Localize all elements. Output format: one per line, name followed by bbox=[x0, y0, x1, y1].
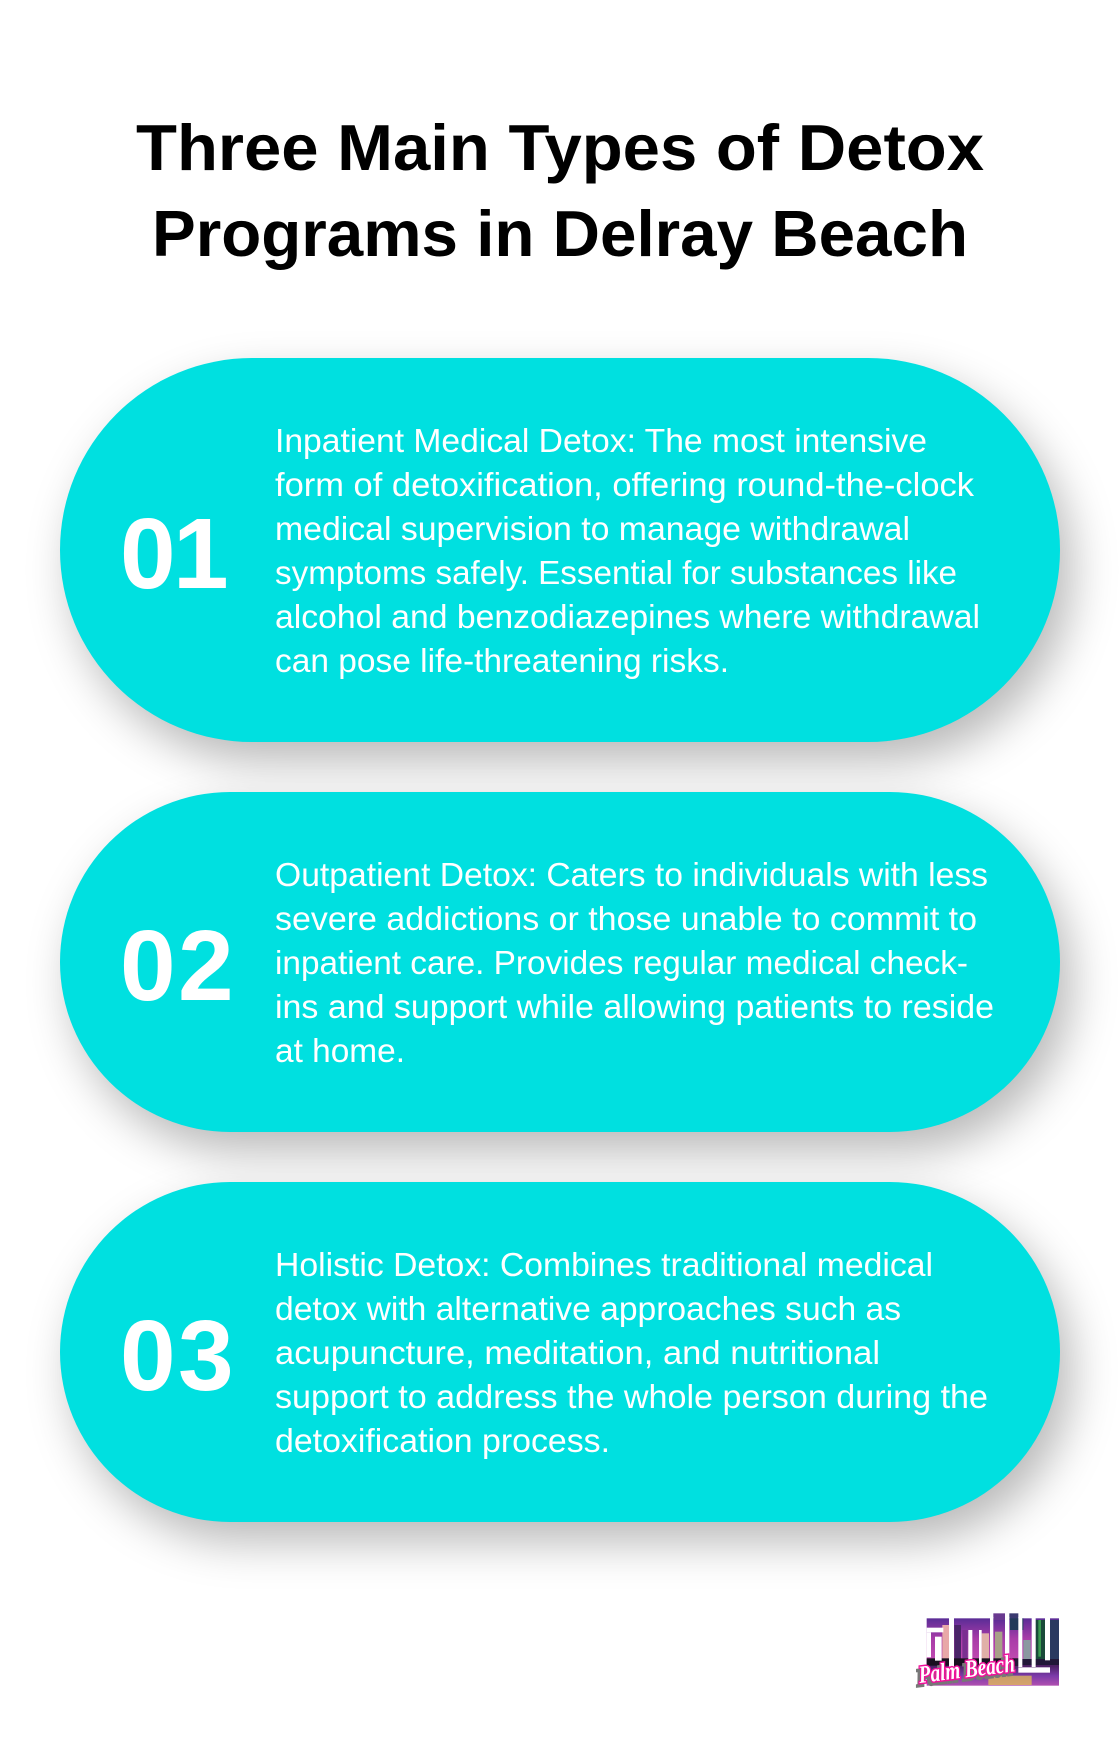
number 01: 01 bbox=[120, 498, 229, 610]
text block: outpatient description: inpatient care. Provides regular medical check- bbox=[275, 944, 968, 981]
title bbox=[136, 111, 984, 270]
logo script shadow: Palm Beach bbox=[914, 1654, 1014, 1692]
text block: inpatient description: symptoms safely. Essential for substances like bbox=[275, 554, 957, 591]
text block: inpatient description bbox=[275, 422, 980, 679]
text block: inpatient description: alcohol and benzodiazepines where withdrawal bbox=[275, 598, 980, 635]
text block: holistic description: detoxification process. bbox=[275, 1422, 610, 1459]
text block: outpatient description bbox=[275, 856, 994, 1069]
number 02: 02 bbox=[120, 910, 234, 1022]
text block: holistic description: support to address the whole person during the bbox=[275, 1378, 988, 1415]
buildings bbox=[942, 1625, 949, 1660]
panel: outpatient detox bbox=[60, 792, 1060, 1132]
icon: amity palm beach logo bbox=[914, 1613, 1059, 1692]
text block: inpatient description: can pose life-threatening risks. bbox=[275, 642, 729, 679]
text block: holistic description: Holistic Detox: Combines traditional medical bbox=[275, 1246, 933, 1283]
text block: inpatient description: form of detoxification, offering round-the-clock bbox=[275, 466, 975, 503]
text block: holistic description: detox with alternative approaches such as bbox=[275, 1290, 901, 1327]
title: Three Main Types of Detox bbox=[136, 111, 984, 184]
number 03: 03 bbox=[120, 1300, 234, 1412]
text block: inpatient description: Inpatient Medical Detox: The most intensive bbox=[275, 422, 927, 459]
tree line and water bbox=[927, 1658, 1020, 1666]
title: Programs in Delray Beach bbox=[152, 197, 968, 270]
text block: outpatient description: at home. bbox=[275, 1032, 405, 1069]
text block: outpatient description: Outpatient Detox: Caters to individuals with less bbox=[275, 856, 988, 893]
panel: inpatient medical detox bbox=[60, 358, 1060, 742]
text block: inpatient description: medical supervision to manage withdrawal bbox=[275, 510, 910, 547]
text block: outpatient description: ins and support while allowing patients to reside bbox=[275, 988, 994, 1025]
letter gaps bbox=[927, 1617, 1050, 1673]
text block: holistic description: acupuncture, meditation, and nutritional bbox=[275, 1334, 880, 1371]
logo script: Palm Beach bbox=[916, 1650, 1016, 1689]
text block: outpatient description: severe addictions or those unable to commit to bbox=[275, 900, 977, 937]
panel: holistic detox bbox=[60, 1182, 1060, 1522]
text block: holistic description bbox=[275, 1246, 988, 1459]
